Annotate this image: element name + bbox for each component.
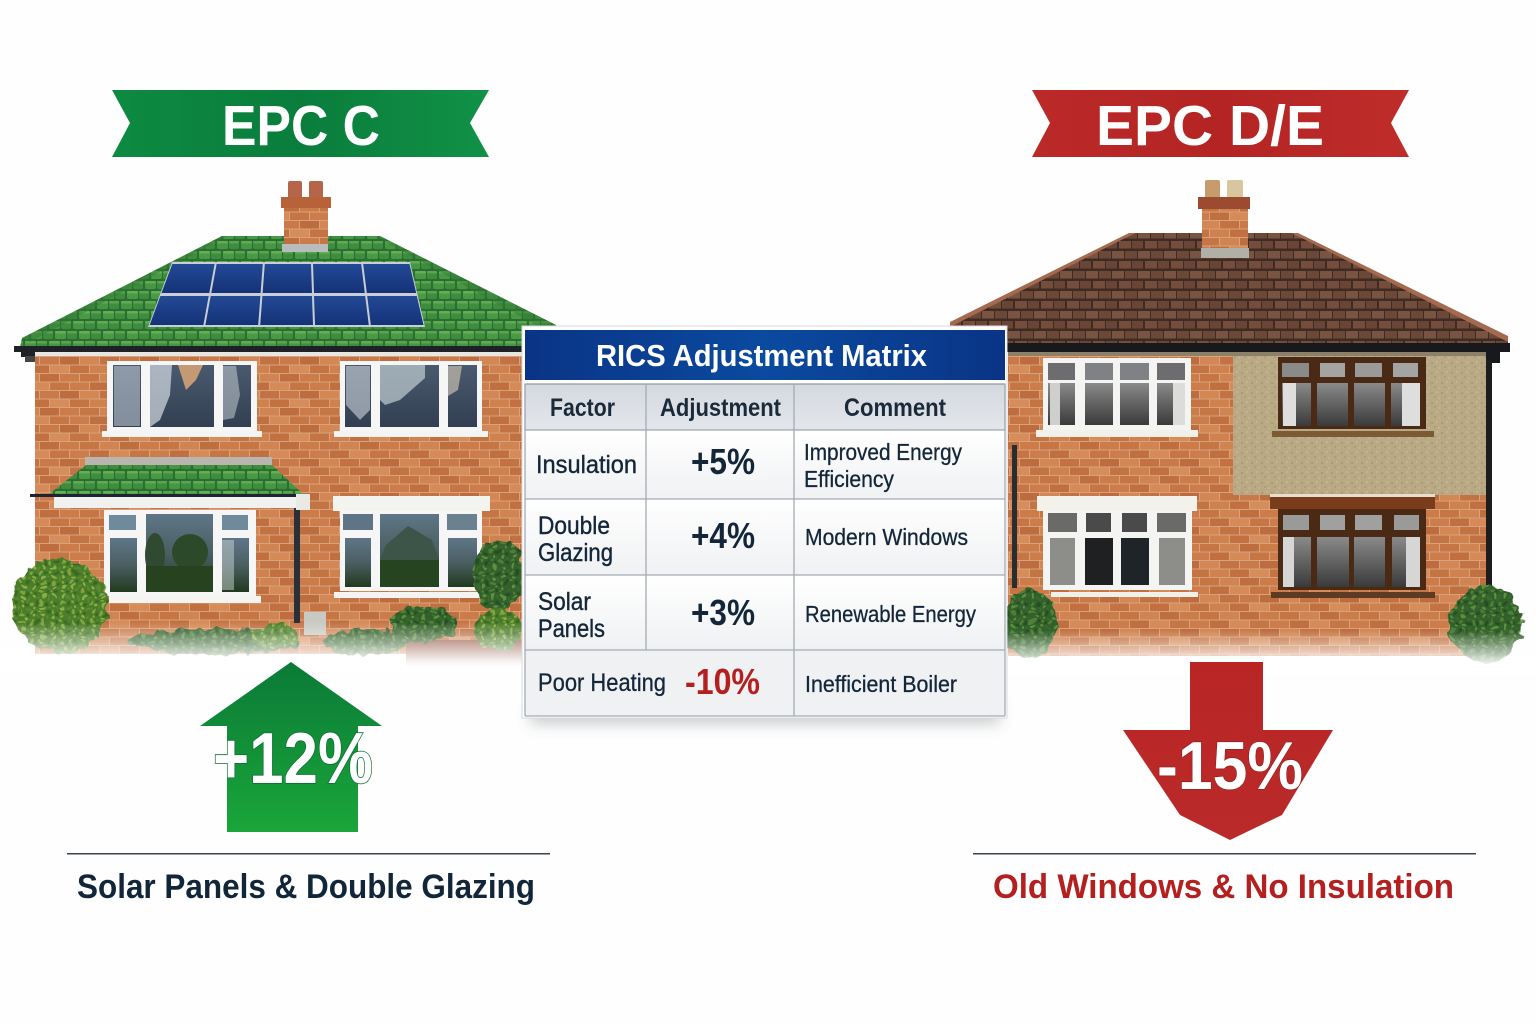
table row: Poor Heating	[525, 650, 1005, 716]
table row: Insulation: Efficiency	[804, 466, 894, 492]
table row: Solar Panels: Renewable Energy	[805, 601, 976, 627]
table row: Double Glazing	[525, 499, 1005, 575]
upper left window	[102, 361, 262, 437]
porch roof	[30, 457, 304, 508]
table header row	[525, 384, 1005, 430]
hedge planting	[130, 605, 524, 665]
eaves gutter	[1006, 343, 1510, 363]
brown lower window	[1270, 494, 1435, 598]
table header row: Comment	[844, 394, 947, 422]
arrow: down, -15%	[1123, 662, 1333, 840]
lower right window	[333, 496, 490, 598]
table row: Insulation: Insulation	[536, 451, 637, 479]
table row: Insulation: +5%	[691, 441, 755, 482]
table row: Double Glazing: Double	[538, 512, 610, 540]
ground fade	[1006, 630, 1536, 674]
brick wall	[35, 354, 525, 654]
brick wall	[1008, 352, 1486, 656]
icon: right bush	[1448, 586, 1522, 662]
caption: Old Windows & No Insulation: Old Windows & No Insulation	[993, 868, 1454, 906]
banner: EPC D/E: EPC D/E	[1096, 94, 1324, 158]
table shadow	[530, 706, 1000, 724]
roof with brown tiles	[950, 233, 1508, 346]
white upper window	[1036, 358, 1198, 437]
table row: Solar Panels: +3%	[691, 592, 755, 633]
icon: chimney pots	[288, 181, 323, 198]
roof with green tiles	[20, 236, 556, 347]
table row: Double Glazing: Glazing	[538, 539, 613, 567]
arrow: up, +12%	[200, 662, 382, 832]
table header row: Factor	[550, 394, 615, 422]
upper right window	[334, 361, 488, 437]
panel: RICS adjustment matrix	[522, 326, 1007, 724]
solar panels	[148, 262, 425, 327]
table row: Poor Heating: Poor Heating	[538, 669, 666, 697]
table row: Poor Heating: Inefficient Boiler	[805, 671, 957, 697]
table title	[525, 330, 1005, 380]
brown upper window	[1272, 357, 1434, 437]
table row: Double Glazing: Modern Windows	[805, 524, 968, 550]
icon: right shrubs	[473, 539, 525, 651]
icon: chimney	[281, 197, 331, 252]
eaves gutter	[14, 346, 524, 362]
table row: Solar Panels	[525, 575, 1005, 650]
icon: left bush	[1003, 589, 1057, 659]
ground fade	[0, 622, 526, 672]
arrow: up, +12%: +12%	[213, 719, 373, 799]
icon: chimney	[1198, 197, 1250, 258]
icon: round bush	[12, 559, 108, 653]
table row: Poor Heating: -10%	[685, 661, 760, 702]
table grid lines	[525, 384, 1005, 716]
icon: chimney pots	[1205, 180, 1243, 198]
caption: Solar Panels & Double Glazing: Solar Panels & Double Glazing	[77, 868, 535, 906]
banner: EPC C	[112, 90, 489, 158]
table row: Double Glazing: +4%	[691, 515, 755, 556]
panel: EPC D/E house	[950, 180, 1536, 674]
table header row: Adjustment	[660, 394, 782, 422]
table row: Insulation: Improved Energy	[804, 439, 962, 465]
banner: EPC D/E	[1032, 90, 1409, 158]
lower left window	[104, 510, 261, 603]
downpipe	[294, 494, 326, 635]
table frame	[522, 326, 1007, 718]
table row: Solar Panels: Solar	[538, 588, 591, 616]
panel: EPC C house	[0, 181, 556, 672]
table row: Solar Panels: Panels	[538, 615, 605, 643]
white lower window	[1037, 496, 1198, 597]
table row: Insulation	[525, 430, 1005, 499]
downpipes	[1012, 360, 1492, 592]
banner: EPC C: EPC C	[222, 94, 380, 158]
table title: RICS Adjustment Matrix	[596, 338, 928, 373]
rendered wall section	[1233, 353, 1486, 495]
arrow: down, -15%: -15%	[1157, 728, 1303, 804]
